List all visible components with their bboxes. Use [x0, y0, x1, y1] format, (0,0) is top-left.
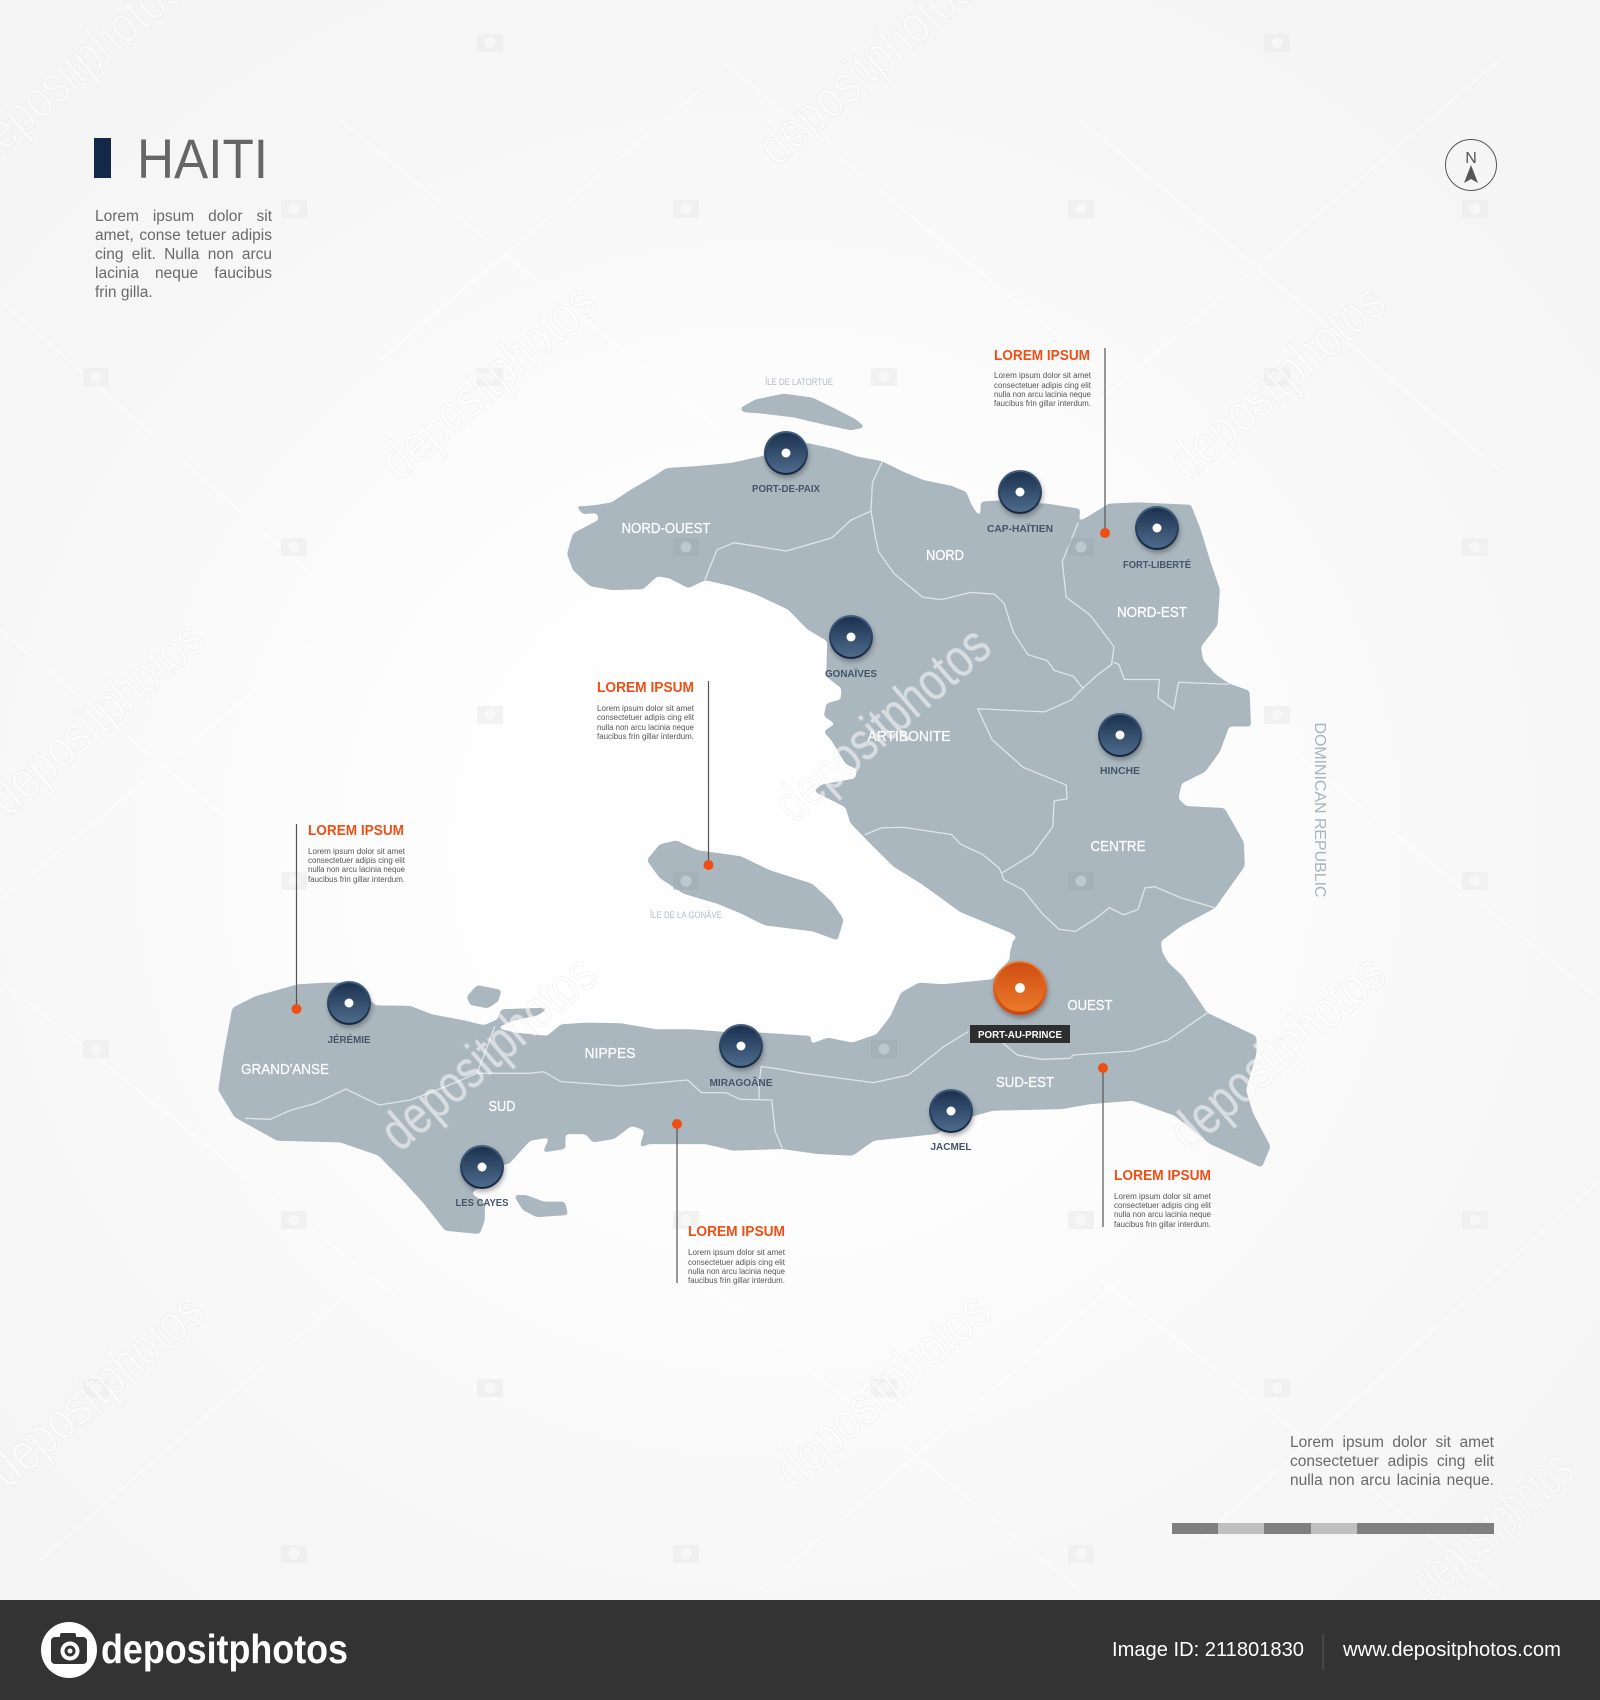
- footer bar: [0, 1600, 1600, 1700]
- city pin: Les Cayes: [456, 1145, 508, 1209]
- callout: Sud: LOREM IPSUM: [688, 1224, 785, 1240]
- callout: Gonave: consectetuer adipis cing elit: [597, 713, 695, 722]
- intro text block: amet, conse tetuer adipis: [95, 227, 272, 244]
- region labels: GRAND'ANSE: [241, 1062, 329, 1078]
- watermark text: depositphotos: [369, 272, 608, 491]
- region labels: SUD: [488, 1099, 516, 1115]
- callout: Grand'Anse: LOREM IPSUM: [308, 823, 404, 839]
- region labels: NORD: [926, 548, 964, 564]
- icon: north compass: [1446, 140, 1496, 190]
- land masses: [219, 394, 1270, 1233]
- city pin: Cap-Haitien: [987, 470, 1053, 535]
- city pin: Les Cayes: LES CAYES: [456, 1197, 508, 1209]
- website: www.depositphotos.com: [1342, 1639, 1561, 1661]
- capital pin: Port-au-Prince: [970, 961, 1070, 1043]
- city pin: Hinche: [1098, 713, 1142, 777]
- region labels: NIPPES: [584, 1046, 636, 1062]
- region borders: north: [705, 462, 1229, 931]
- callout: Gonave: LOREM IPSUM: [597, 680, 694, 696]
- city pin: Fort-Liberte: [1123, 506, 1191, 571]
- intro text block: frin gilla.: [95, 284, 153, 301]
- callout: Sud: faucibus frin gillar interdum.: [688, 1276, 785, 1285]
- callout: Grand'Anse: [292, 823, 406, 1014]
- callout: Sud: Lorem ipsum dolor sit amet: [688, 1248, 786, 1257]
- island labels: ÎLE DE LATORTUE: [764, 377, 833, 387]
- city pin: Cap-Haitien: CAP-HAÏTIEN: [987, 522, 1053, 535]
- footer logo icon: [41, 1622, 97, 1678]
- island: Cayemites: [467, 985, 502, 1008]
- city pin: Miragoane: [710, 1024, 772, 1089]
- watermark text: depositphotos: [763, 1280, 1002, 1499]
- city pin: Hinche: HINCHE: [1100, 765, 1140, 777]
- footer logo wordmark: depositphotos: [101, 1626, 348, 1672]
- callout: Sud-Est: nulla non arcu lacinia neque: [1114, 1210, 1212, 1219]
- watermark text: depositphotos: [369, 943, 608, 1162]
- callout: Gonave: [597, 680, 714, 870]
- neighbour label: Dominican Republic: DOMINICAN REPUBLIC: [1311, 722, 1328, 898]
- callout: north-east: faucibus frin gillar interdum.: [994, 399, 1091, 408]
- island: Ile de la Tortue: [740, 394, 865, 430]
- city pin: Miragoane: MIRAGOÂNE: [710, 1076, 772, 1089]
- callout: Sud-Est: Lorem ipsum dolor sit amet: [1114, 1192, 1212, 1201]
- island: Ile de la Gonave: [647, 840, 844, 940]
- callout: Grand'Anse: faucibus frin gillar interdum.: [308, 875, 405, 884]
- region labels: ARTIBONITE: [868, 729, 951, 745]
- callout: Sud-Est: faucibus frin gillar interdum.: [1114, 1220, 1211, 1229]
- callout: north-east: [994, 348, 1110, 538]
- intro text block: Lorem ipsum dolor sit: [95, 208, 272, 225]
- bottom-right text block: [1290, 1434, 1494, 1489]
- footer divider: [1322, 1634, 1324, 1670]
- intro text block: [95, 208, 272, 301]
- city pin: Jacmel: [929, 1089, 973, 1153]
- callout: north-east: consectetuer adipis cing elit: [994, 381, 1092, 390]
- city pin: Port-de-Paix: [752, 431, 820, 495]
- intro text block: cing elit. Nulla non arcu: [95, 246, 272, 263]
- intro text block: lacinia neque faucibus: [95, 265, 272, 282]
- southern peninsula: [219, 940, 1270, 1233]
- region labels: NORD-EST: [1117, 605, 1187, 621]
- icon: north compass: N: [1465, 150, 1477, 167]
- northern peninsula and centre: [568, 444, 1250, 980]
- city pin: Jacmel: JACMEL: [930, 1141, 972, 1153]
- city pin: Jeremie: [327, 981, 371, 1046]
- region labels: OUEST: [1068, 998, 1113, 1014]
- capital pin: Port-au-Prince: PORT-AU-PRINCE: [978, 1029, 1062, 1041]
- bottom-right text block: consectetuer adipis cing elit: [1290, 1453, 1494, 1470]
- map of Haiti: [219, 394, 1270, 1233]
- island labels: ÎLE DE LA GONÂVE: [649, 910, 722, 920]
- title accent bar: [94, 138, 111, 178]
- watermark text: depositphotos: [1158, 272, 1397, 491]
- callout: Sud-Est: [1098, 1063, 1212, 1229]
- callout: north-east: nulla non arcu lacinia neque: [994, 390, 1092, 399]
- bottom-right text block: nulla non arcu lacinia neque.: [1290, 1472, 1494, 1489]
- callout: Sud-Est: LOREM IPSUM: [1114, 1168, 1211, 1184]
- region labels: NORD-OUEST: [622, 521, 711, 537]
- city pin: Gonaives: [825, 615, 877, 680]
- region borders: south: [246, 1013, 1207, 1148]
- region labels: SUD-EST: [996, 1075, 1054, 1091]
- city pin: Fort-Liberte: FORT-LIBERTÉ: [1123, 558, 1191, 571]
- callout: north-east: LOREM IPSUM: [994, 348, 1090, 364]
- callout: north-east: Lorem ipsum dolor sit amet: [994, 371, 1092, 380]
- city pin: Gonaives: GONAÏVES: [825, 667, 877, 680]
- image id: Image ID: 211801830: [1112, 1639, 1304, 1661]
- callout: Gonave: Lorem ipsum dolor sit amet: [597, 704, 695, 713]
- callout: Sud: nulla non arcu lacinia neque: [688, 1267, 786, 1276]
- island labels: [649, 377, 833, 920]
- region labels: CENTRE: [1090, 839, 1146, 855]
- island: Ile a Vache: [514, 1195, 568, 1217]
- title: HAITI: [137, 127, 268, 190]
- callout: Sud-Est: consectetuer adipis cing elit: [1114, 1201, 1212, 1210]
- callout: Sud: consectetuer adipis cing elit: [688, 1258, 786, 1267]
- callout: Grand'Anse: nulla non arcu lacinia neque: [308, 865, 406, 874]
- city pin: Jeremie: JÉRÉMIE: [328, 1033, 370, 1046]
- scale bar: [1172, 1523, 1494, 1534]
- callout: Gonave: nulla non arcu lacinia neque: [597, 723, 695, 732]
- callout: Sud: [672, 1119, 786, 1285]
- bottom-right text block: Lorem ipsum dolor sit amet: [1290, 1434, 1494, 1451]
- watermark text: depositphotos: [1158, 943, 1397, 1162]
- watermark text: depositphotos: [763, 615, 1002, 834]
- region labels: [241, 521, 1187, 1115]
- watermark camera icons on the map: [673, 538, 1094, 1058]
- watermark camera icons: [83, 34, 1488, 1563]
- callout: Grand'Anse: consectetuer adipis cing elit: [308, 856, 406, 865]
- callout: Gonave: faucibus frin gillar interdum.: [597, 732, 694, 741]
- city pin: Port-de-Paix: PORT-DE-PAIX: [752, 483, 820, 495]
- callout: Grand'Anse: Lorem ipsum dolor sit amet: [308, 847, 406, 856]
